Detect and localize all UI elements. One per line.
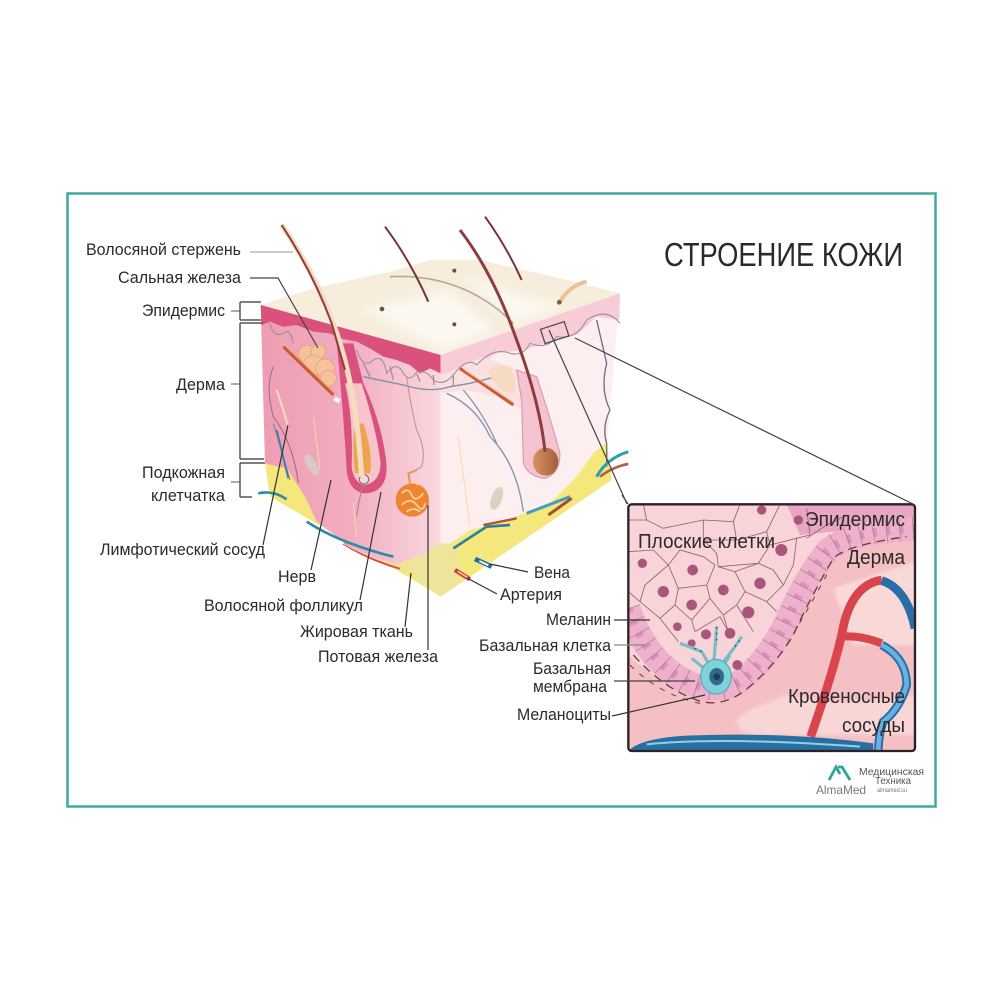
left arrector muscle — [283, 347, 333, 395]
labels: inset: Эпидермис — [805, 509, 905, 531]
right hair follicle — [517, 370, 560, 478]
right sebaceous gland — [487, 365, 515, 393]
artery and vein stubs — [455, 570, 470, 579]
logo: AlmaMed: almamed.su — [877, 788, 907, 794]
subcutaneous fat — [265, 442, 612, 597]
labels: inset: Дерма — [847, 547, 906, 569]
vessels in dermis — [447, 390, 523, 512]
leader lines — [231, 252, 915, 716]
bottom vein — [628, 735, 873, 751]
left sebaceous gland — [299, 344, 336, 386]
skin surface top face — [261, 260, 620, 355]
left face dermis — [261, 305, 441, 564]
labels: skin layers and structures: Сальная железа — [118, 268, 242, 287]
basal cell band — [628, 528, 915, 688]
right arrector muscle — [460, 368, 513, 405]
sweat gland — [396, 470, 429, 517]
melanocyte cell — [701, 659, 731, 694]
labels: inset: сосуды — [842, 715, 905, 737]
labels: skin layers and structures: Артерия — [500, 585, 562, 604]
upper cells — [628, 504, 847, 642]
labels: skin layers and structures: Базальная — [533, 659, 611, 678]
inset border — [628, 504, 915, 751]
labels: skin layers and structures: Нерв — [278, 567, 316, 586]
dermis background — [630, 540, 914, 750]
right face upper dermis — [441, 293, 620, 375]
right hair shaft — [460, 230, 545, 452]
labels: skin layers and structures: мембрана — [533, 677, 607, 696]
inset: epidermis and dermis — [628, 504, 915, 752]
cross-section vessels — [258, 492, 393, 557]
logo: AlmaMed: Медицинская — [859, 767, 924, 778]
labels: skin layers and structures: Волосяной фолликул — [204, 596, 363, 615]
labels: skin layers and structures: Лимфотический сосуд — [100, 540, 265, 559]
labels: skin layers and structures: Базальная клетка — [479, 636, 612, 655]
fat cell ovals — [302, 452, 322, 478]
labels: skin layers and structures: клетчатка — [151, 486, 226, 505]
labels: inset: Плоские клетки — [638, 531, 775, 553]
labels: skin layers and structures: Волосяной стержень — [86, 240, 241, 259]
nuclei — [638, 505, 803, 670]
labels: inset — [638, 509, 906, 737]
labels: skin layers and structures: Вена — [534, 563, 570, 582]
labels: skin layers and structures: Жировая ткань — [300, 622, 413, 641]
basal membrane dashes — [633, 537, 907, 703]
labels: skin layers and structures: Дерма — [176, 375, 226, 394]
labels: skin layers and structures — [86, 240, 612, 724]
right face dermis — [441, 293, 620, 543]
skin cube illustration — [258, 217, 628, 597]
frame — [68, 194, 936, 806]
logo: AlmaMed: AlmaMed — [816, 783, 866, 797]
labels: skin layers and structures: Меланин — [546, 610, 611, 629]
labels: skin layers and structures: Потовая железа — [318, 647, 439, 666]
left face epidermis — [261, 305, 441, 373]
papillae line — [270, 314, 620, 382]
epidermis body — [630, 506, 835, 680]
logo: AlmaMed: Техника — [875, 776, 911, 787]
left hair follicle — [337, 343, 387, 493]
labels: skin layers and structures: Подкожная — [142, 463, 225, 482]
blood vessels — [811, 580, 882, 737]
logo: AlmaMed — [816, 767, 924, 797]
labels: skin layers and structures: Эпидермис — [142, 301, 225, 320]
melanocyte dendrites — [680, 627, 742, 672]
labels: inset: Кровеносные — [788, 686, 905, 708]
labels: skin layers and structures: Меланоциты — [517, 705, 611, 724]
title: СТРОЕНИЕ КОЖИ — [664, 236, 903, 273]
left hair shaft — [282, 225, 362, 477]
top hairs — [385, 227, 428, 302]
